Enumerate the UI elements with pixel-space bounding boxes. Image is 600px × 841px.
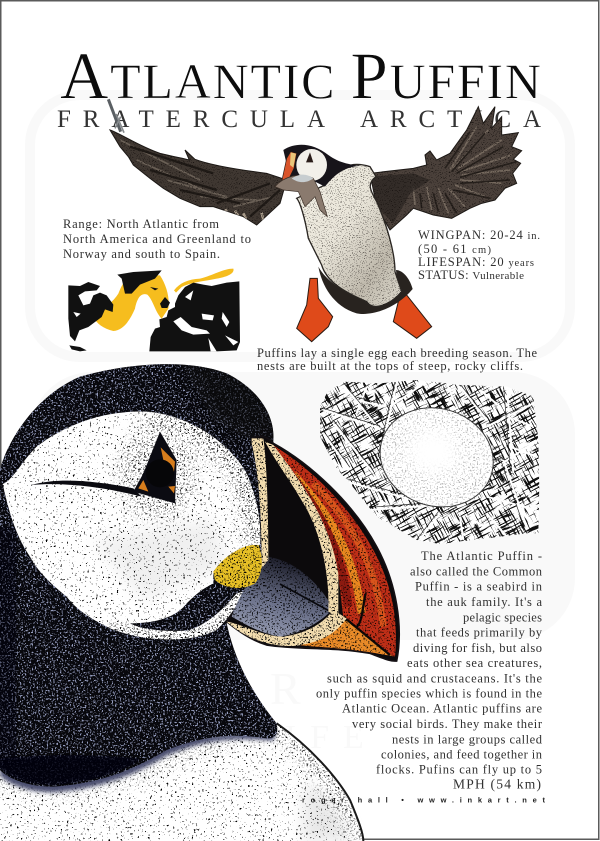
subtitle: latin name: ARCTICA	[360, 106, 541, 133]
faint watermark panels: R	[270, 663, 301, 714]
main description text: pelagic species	[463, 610, 542, 624]
stats text: STATUS: Vulnerable	[418, 268, 524, 282]
main description text: MPH (54 km)	[453, 777, 541, 792]
faint watermark panels: LIFE	[250, 719, 378, 756]
egg intro text: nests are built at the tops of steep, rocky cliffs.	[257, 359, 523, 373]
artist credit: roger hall • www.inkart.net	[302, 796, 546, 805]
main description text: only puffin species which is found in the	[316, 686, 542, 700]
title: ATLANTIC PUFFIN	[60, 39, 541, 113]
greenland	[117, 270, 162, 294]
caribbean islands	[69, 345, 87, 351]
lower mandible grey plate	[232, 557, 330, 636]
soft neck shadow	[0, 731, 277, 792]
iceland and britain	[150, 287, 170, 308]
white seas	[73, 290, 238, 351]
main description text: colonies, and feed together in	[381, 747, 543, 761]
nest straw texture	[320, 380, 540, 544]
beak	[282, 152, 297, 183]
main description text: very social birds. They make their	[352, 717, 543, 731]
beak outline	[227, 436, 399, 661]
left foot	[297, 278, 333, 342]
main description text	[316, 549, 543, 792]
right foot	[393, 277, 432, 338]
stats text: (50 - 61 cm)	[418, 242, 492, 256]
egg	[367, 393, 506, 521]
lower body	[0, 723, 363, 841]
main description text: diving for fish, but also	[413, 641, 542, 655]
mandible dividing line	[280, 584, 337, 615]
stats text: LIFESPAN: 20 years	[418, 255, 534, 269]
fish in beak	[275, 175, 327, 217]
subtitle: latin name: FRATERCULA	[57, 106, 325, 133]
belly stipple	[299, 164, 401, 305]
lower body grey shade	[300, 783, 352, 841]
main description text: flocks. Pufins can fly up to 5	[376, 763, 542, 777]
yellow range area	[93, 269, 234, 331]
eye line	[32, 481, 142, 497]
grey-blue speckle on plumage	[0, 353, 287, 790]
range text: North America and Greenland to	[63, 232, 251, 246]
large puffin head portrait	[0, 353, 407, 841]
main description text: also called the Common	[410, 564, 543, 578]
egg speckles	[380, 408, 493, 506]
belly	[297, 164, 402, 306]
main description text: nests in large groups called	[392, 732, 543, 746]
cheek stipple	[0, 407, 267, 643]
stats text: WINGPAN: 20-24 in.	[418, 228, 540, 242]
range text	[63, 217, 251, 261]
main description text: that feeds primarily by	[416, 626, 543, 640]
nest and egg illustration	[320, 380, 540, 544]
cheek shading	[104, 524, 222, 595]
face	[296, 149, 327, 181]
black head and neck	[0, 364, 277, 787]
lower body stipple	[0, 720, 367, 841]
cream beak bands	[227, 438, 347, 646]
egg intro text: Puffins lay a single egg each breeding season. The	[257, 346, 537, 360]
body outline	[277, 723, 363, 841]
band stipple	[230, 438, 346, 646]
range map	[68, 269, 240, 351]
right wing of flying puffin	[372, 106, 522, 231]
faint watermark panels	[30, 95, 575, 756]
main description text: eats other sea creatures,	[407, 656, 542, 670]
stats text	[418, 228, 540, 282]
europe, asia and africa	[149, 281, 240, 351]
range text: Range: North Atlantic from	[63, 217, 219, 231]
main description text: The Atlantic Puffin -	[421, 549, 542, 563]
head with cap and white face	[283, 145, 370, 187]
egg intro text	[257, 346, 537, 373]
rosette stipple	[214, 545, 262, 588]
flying puffin body	[275, 145, 432, 342]
left wing of flying puffin	[107, 99, 293, 230]
eye	[306, 152, 313, 162]
white cheek	[3, 412, 260, 639]
range text: Norway and south to Spain.	[63, 247, 220, 261]
main description text: such as squid and crustaceans. It's the	[327, 671, 542, 685]
main description text: Atlantic Ocean. Atlantic puffins are	[342, 702, 542, 716]
north america	[68, 282, 113, 341]
main description text: the auk family. It's a	[426, 595, 542, 609]
dark tail skirt	[318, 267, 413, 314]
main description text: Puffin - is a seabird in	[415, 580, 543, 594]
eye	[133, 432, 177, 503]
yellow gape rosette	[213, 545, 262, 588]
beak red and orange plates	[270, 444, 396, 656]
subtitle: latin name	[57, 106, 541, 133]
